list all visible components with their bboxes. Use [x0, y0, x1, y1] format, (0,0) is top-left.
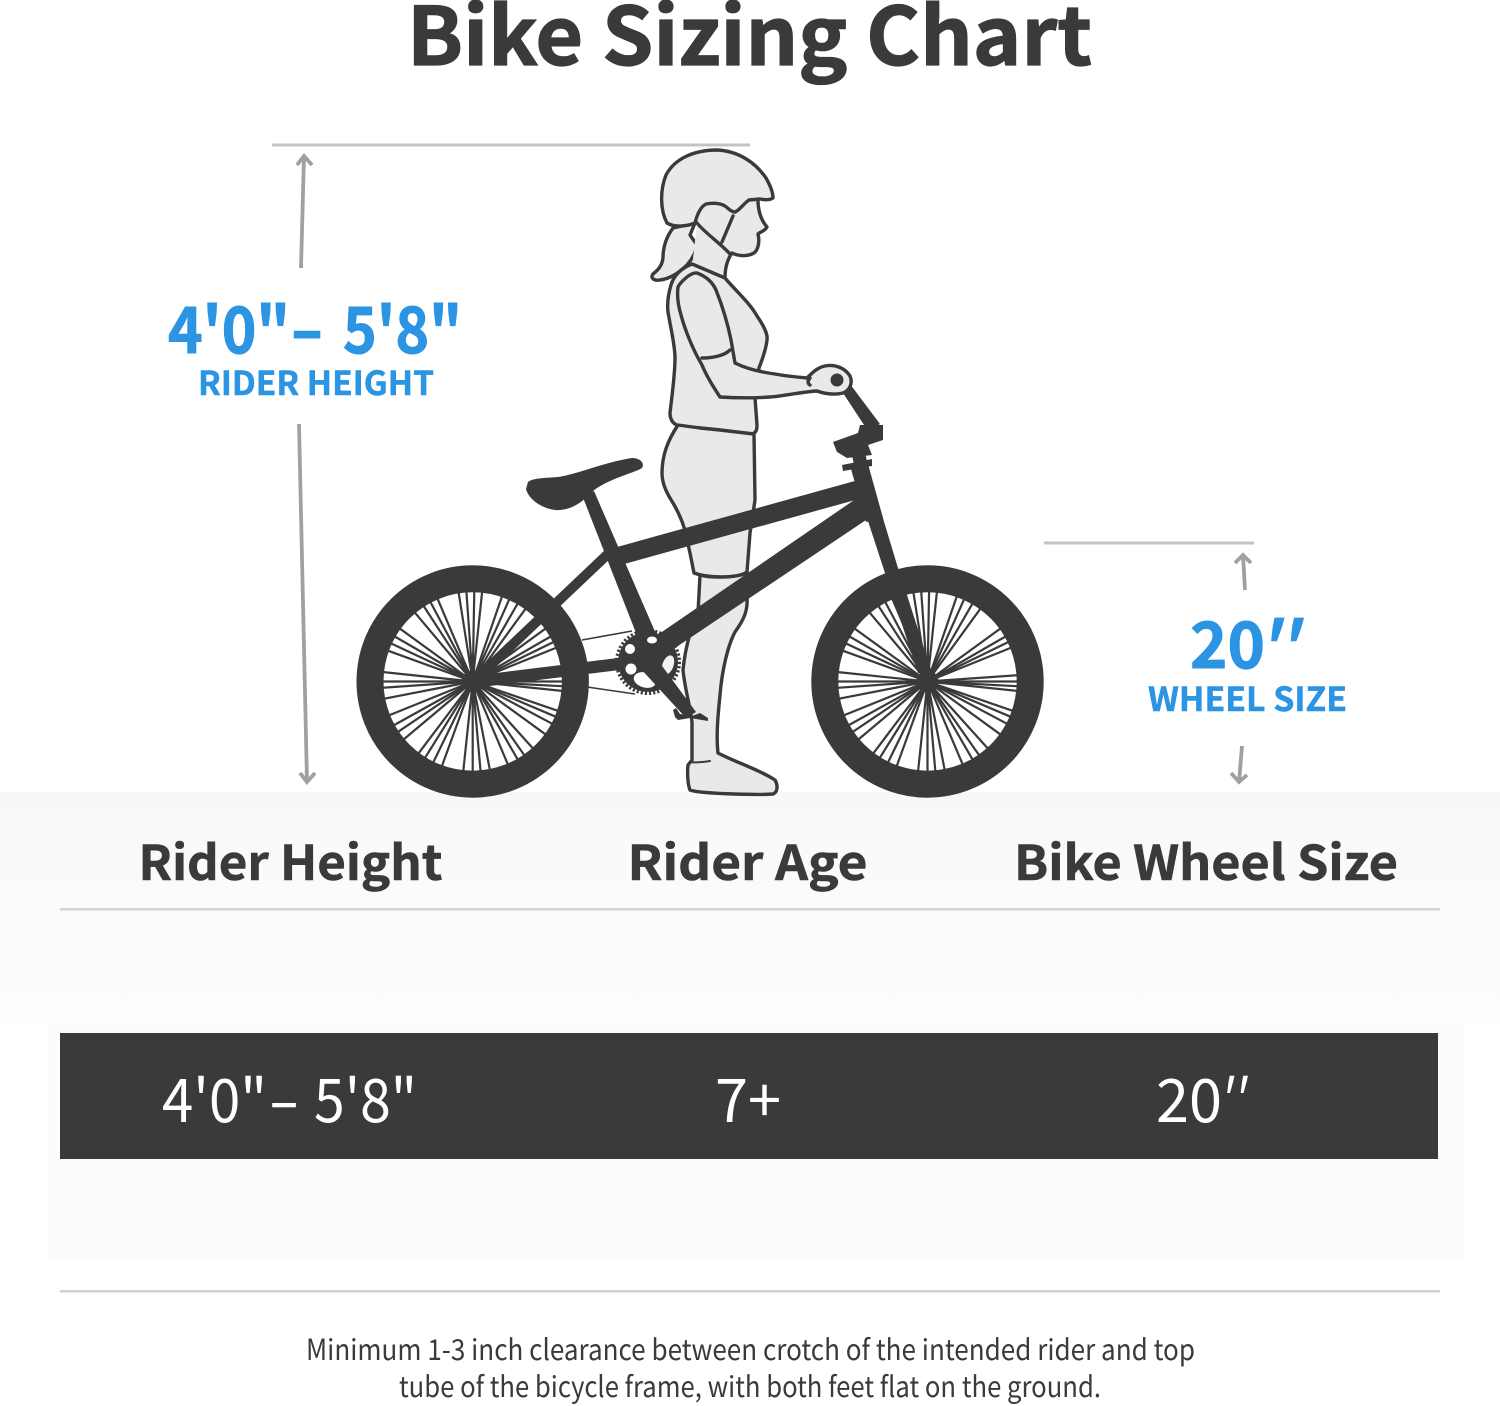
torso	[668, 264, 767, 434]
rider figure	[652, 150, 777, 794]
footnote	[306, 1327, 1195, 1406]
face outline	[725, 200, 767, 278]
table header	[138, 824, 1398, 894]
chain	[582, 631, 635, 694]
rider height value: 5'8"	[343, 280, 462, 372]
footnote: Minimum 1-3 inch clearance between crotch of the intended rider and top	[306, 1327, 1195, 1369]
shorts	[662, 425, 755, 577]
chainring	[616, 630, 680, 694]
row value: wheel size: 20	[1156, 1053, 1222, 1140]
leg and shoe	[683, 573, 777, 794]
crank arm	[640, 655, 696, 718]
wheel size label: WHEEL SIZE	[1148, 673, 1347, 721]
arrow: wheel up	[1235, 555, 1251, 590]
face and neck	[692, 198, 767, 278]
stem and handlebar post	[833, 384, 883, 471]
saddle	[526, 458, 643, 510]
front wheel	[825, 579, 1030, 784]
footnote: tube of the bicycle frame, with both feet flat on the ground.	[399, 1364, 1101, 1406]
wheel size measure	[1044, 543, 1347, 782]
arrow: height up	[297, 156, 312, 268]
rider arm and hand	[678, 273, 851, 398]
row value: height: -	[268, 1053, 300, 1140]
rider height value: -	[290, 280, 324, 372]
rider height measure	[168, 145, 750, 782]
rider height value: 4'0"	[168, 280, 290, 372]
down tube	[656, 496, 872, 650]
wheel size value: 20	[1190, 595, 1265, 687]
arrow: wheel down	[1231, 746, 1247, 782]
table row	[60, 1033, 1438, 1159]
row value: wheel size: ''	[1216, 1053, 1248, 1140]
row value: height	[162, 1053, 417, 1140]
rider height label: RIDER HEIGHT	[198, 357, 434, 405]
seat stay and chain stay	[469, 549, 652, 688]
helmet strap	[697, 216, 733, 254]
wheel size value: ''	[1258, 595, 1304, 687]
column heading: rider height: Rider Height	[138, 824, 442, 894]
rear wheel	[370, 579, 575, 784]
rider height value	[168, 280, 462, 372]
column heading: wheel size: Bike Wheel Size	[1014, 824, 1398, 894]
bicycle	[370, 384, 1030, 784]
seat post and seat tube	[582, 491, 663, 656]
wheel size value	[1190, 595, 1304, 687]
row value: height: 4'0"	[162, 1053, 267, 1140]
helmet	[662, 150, 773, 226]
head tube	[851, 464, 883, 522]
arrow: height down	[299, 424, 315, 782]
pedal	[673, 708, 708, 721]
top tube	[610, 479, 866, 566]
row value: height: 5'8"	[314, 1053, 417, 1140]
hair	[652, 223, 697, 280]
row value: age: 7+	[715, 1053, 781, 1140]
fork	[867, 515, 932, 673]
column heading: rider age: Rider Age	[628, 824, 868, 894]
